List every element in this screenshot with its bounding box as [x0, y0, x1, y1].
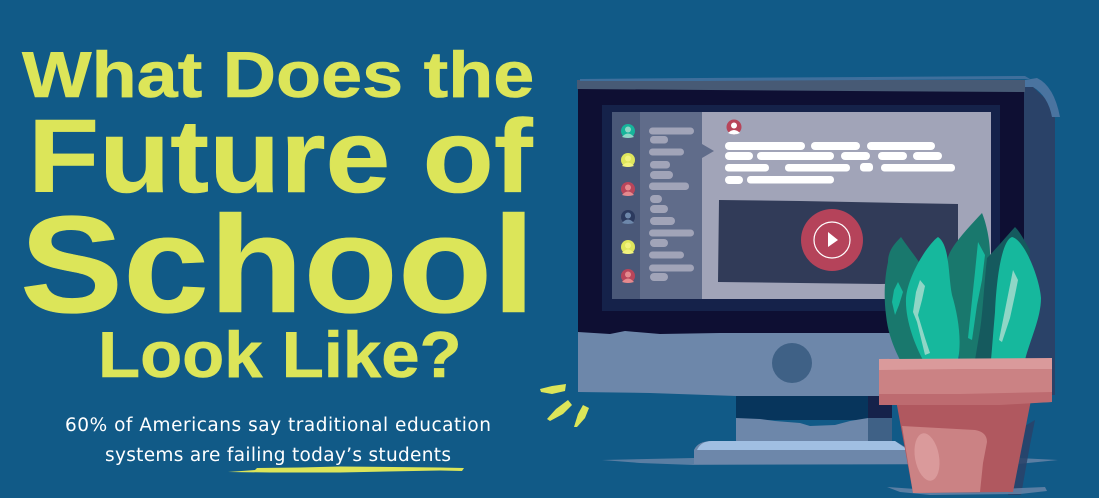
- monitor: [577, 76, 1060, 464]
- monitor body: [578, 88, 1024, 340]
- leaf back left: [885, 237, 930, 360]
- subtitle: 60% of Americans say traditional education: [65, 415, 491, 436]
- title: School: [20, 188, 535, 342]
- leaf back right: [975, 227, 1030, 360]
- leaf front left: [906, 237, 960, 360]
- subtitle: [65, 415, 491, 472]
- floor shadow: [602, 458, 1058, 465]
- pot highlight: [911, 431, 943, 483]
- title: [20, 38, 535, 392]
- pot rim: [879, 359, 1052, 405]
- message avatar: [726, 120, 742, 134]
- screen bezel: [602, 105, 1000, 311]
- play button: [801, 209, 863, 271]
- screen: [612, 112, 991, 299]
- monitor side panel: [1024, 87, 1055, 395]
- subtitle underline: [228, 466, 464, 472]
- pot shadow: [1008, 420, 1035, 495]
- pot body: [896, 400, 1031, 493]
- message text lines: [725, 142, 955, 184]
- leaf front right: [991, 237, 1041, 360]
- monitor top edge: [577, 76, 1060, 117]
- video player: [718, 200, 958, 284]
- contact name lines: [649, 128, 694, 281]
- sparkle marks: [540, 384, 589, 427]
- monitor button: [772, 343, 812, 383]
- subtitle: systems are failing today’s students: [105, 445, 451, 466]
- plant: [885, 213, 1041, 360]
- leaf highlights: [913, 270, 1018, 355]
- contacts sidebar: [612, 112, 714, 299]
- avatars: [621, 124, 635, 283]
- monitor chin: [578, 331, 900, 396]
- monitor stand: [694, 394, 915, 464]
- title: Look Like?: [98, 319, 462, 392]
- title: Future of: [28, 99, 533, 215]
- plant pot: [879, 358, 1052, 495]
- leaf back centre: [945, 213, 990, 360]
- title: What Does the: [22, 38, 534, 111]
